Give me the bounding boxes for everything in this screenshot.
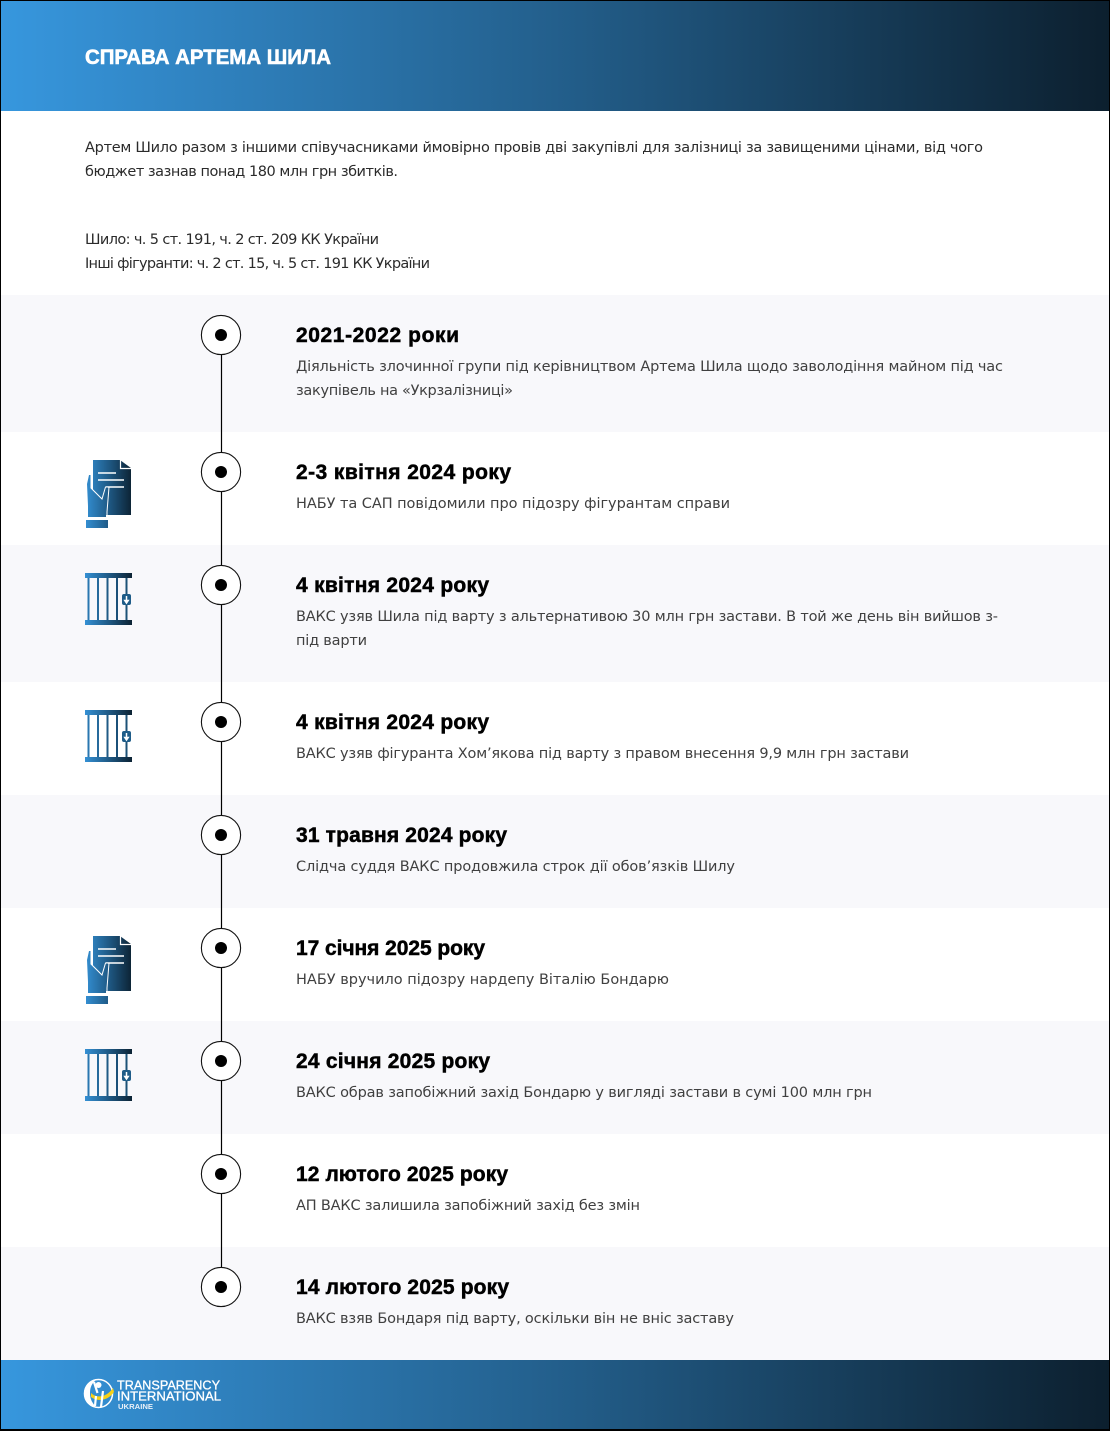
- event 1 text: 2021-2022 роки: [296, 324, 459, 347]
- event 2 text: 2-3 квітня 2024 року: [296, 461, 511, 484]
- event 2 text: [296, 461, 730, 512]
- legal articles text: Шило: ч. 5 ст. 191, ч. 2 ст. 209 КК України: [85, 232, 379, 248]
- event 2 text: НАБУ та САП повідомили про підозру фігурантам справи: [296, 496, 730, 512]
- event 1 text: Діяльність злочинної групи під керівництвом Артема Шила щодо заволодіння майном під час: [296, 359, 1003, 375]
- icon: document in hand: [86, 936, 131, 1004]
- event 3 text: [296, 574, 998, 649]
- icon: prison bars: [85, 1049, 132, 1101]
- intro text: бюджет зазнав понад 180 млн грн збитків.: [85, 164, 398, 180]
- icon: document in hand: [86, 460, 131, 528]
- event 6 text: 17 січня 2025 року: [296, 937, 485, 960]
- intro text: Артем Шило разом з іншими співучасниками ймовірно провів дві закупівлі для залізниці за завищеними цінами, від чого: [85, 140, 983, 156]
- logo: Transparency International Ukraine: [84, 1378, 221, 1411]
- event 6 text: НАБУ вручило підозру нардепу Віталію Бондарю: [296, 972, 669, 988]
- timeline marker 8: [201, 1154, 241, 1194]
- logo: Transparency International Ukraine: INTERNATIONAL: [117, 1390, 221, 1404]
- timeline marker 4: [201, 702, 241, 742]
- event 7 text: ВАКС обрав запобіжний захід Бондарю у вигляді застави в сумі 100 млн грн: [296, 1085, 872, 1101]
- event 9 text: 14 лютого 2025 року: [296, 1276, 509, 1299]
- event 6 text: [296, 937, 669, 988]
- event 3 text: під варти: [296, 633, 367, 649]
- header band: [0, 0, 1110, 111]
- event 1 text: закупівель на «Укрзалізниці»: [296, 383, 513, 399]
- timeline marker 5: [201, 815, 241, 855]
- event 5 text: [296, 824, 735, 875]
- timeline marker 1: [201, 315, 241, 355]
- event 9 text: ВАКС взяв Бондаря під варту, оскільки він не вніс заставу: [296, 1311, 734, 1327]
- event 3 text: ВАКС узяв Шила під варту з альтернативою 30 млн грн застави. В той же день він вийшов з-: [296, 609, 998, 625]
- icon: prison bars: [85, 573, 132, 625]
- event 5 text: 31 травня 2024 року: [296, 824, 507, 847]
- title: СПРАВА АРТЕМА ШИЛА: [85, 45, 331, 69]
- timeline marker 7: [201, 1041, 241, 1081]
- footer band: [0, 1360, 1110, 1429]
- timeline marker 2: [201, 452, 241, 492]
- event 5 text: Слідча суддя ВАКС продовжила строк дії обов’язків Шилу: [296, 859, 735, 875]
- event 1 text: [296, 324, 1003, 399]
- event 8 text: [296, 1163, 640, 1214]
- event 4 text: ВАКС узяв фігуранта Хом’якова під варту з правом внесення 9,9 млн грн застави: [296, 746, 909, 762]
- event 8 text: 12 лютого 2025 року: [296, 1163, 508, 1186]
- event 7 text: [296, 1050, 872, 1101]
- event 4 text: 4 квітня 2024 року: [296, 711, 489, 734]
- logo: Transparency International Ukraine: TRANSPARENCY: [117, 1378, 221, 1392]
- timeline line: [220, 335, 222, 1287]
- legal articles text: [85, 232, 430, 272]
- timeline marker 6: [201, 928, 241, 968]
- event 3 text: 4 квітня 2024 року: [296, 574, 489, 597]
- event 9 text: [296, 1276, 734, 1327]
- event 7 text: 24 січня 2025 року: [296, 1050, 490, 1073]
- icon: prison bars: [85, 710, 132, 762]
- legal articles text: Інші фігуранти: ч. 2 ст. 15, ч. 5 ст. 191 КК України: [85, 256, 430, 272]
- event 8 text: АП ВАКС залишила запобіжний захід без змін: [296, 1198, 640, 1214]
- logo: Transparency International Ukraine: UKRAINE: [118, 1404, 153, 1411]
- intro text: [85, 140, 983, 180]
- row backgrounds: [0, 295, 1110, 1360]
- timeline marker 9: [201, 1267, 241, 1307]
- event 4 text: [296, 711, 909, 762]
- timeline marker 3: [201, 565, 241, 605]
